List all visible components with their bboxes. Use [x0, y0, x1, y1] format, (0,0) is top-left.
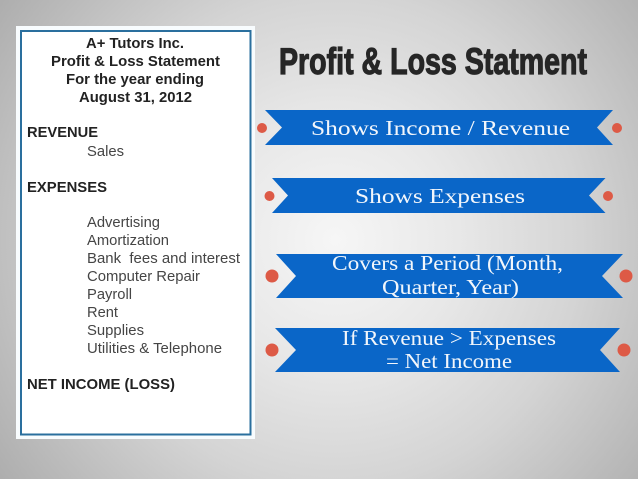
ribbon: covers a period — [266, 251, 632, 299]
revenue section — [27, 124, 124, 160]
ribbon: shows expenses: Shows Expenses — [355, 184, 525, 208]
ribbon: shows expenses — [264, 178, 613, 213]
panel frame — [16, 26, 255, 439]
expenses section: Rent — [87, 304, 119, 321]
expenses section: Supplies — [87, 322, 144, 339]
expenses section: Bank fees and interest — [87, 250, 241, 267]
net income line: NET INCOME (LOSS) — [27, 376, 175, 393]
document heading: A+ Tutors Inc. — [86, 35, 184, 52]
revenue section: Sales — [87, 143, 124, 160]
expenses section: Computer Repair — [87, 268, 200, 285]
expenses section: EXPENSES — [27, 179, 107, 196]
document heading — [51, 35, 220, 106]
ribbon: net income rule — [266, 326, 630, 373]
expenses section: Amortization — [87, 232, 169, 249]
revenue section: REVENUE — [27, 124, 98, 141]
expenses section — [27, 179, 241, 357]
expenses section: Advertising — [87, 214, 160, 231]
expenses section: Payroll — [87, 286, 132, 303]
document heading: For the year ending — [66, 71, 204, 88]
document heading: August 31, 2012 — [79, 89, 192, 106]
ribbon: net income rule: If Revenue > Expenses — [342, 326, 556, 350]
panel: profit and loss statement document — [16, 26, 255, 439]
ribbon: shows income / revenue: Shows Income / Revenue — [311, 116, 570, 140]
ribbon: net income rule: = Net Income — [386, 349, 512, 373]
expenses section: Utilities & Telephone — [87, 340, 222, 357]
document heading: Profit & Loss Statement — [51, 53, 220, 70]
ribbon: shows income / revenue — [257, 110, 622, 145]
ribbon: covers a period: Covers a Period (Month, — [332, 251, 563, 275]
ribbon: covers a period: Quarter, Year) — [382, 275, 519, 299]
